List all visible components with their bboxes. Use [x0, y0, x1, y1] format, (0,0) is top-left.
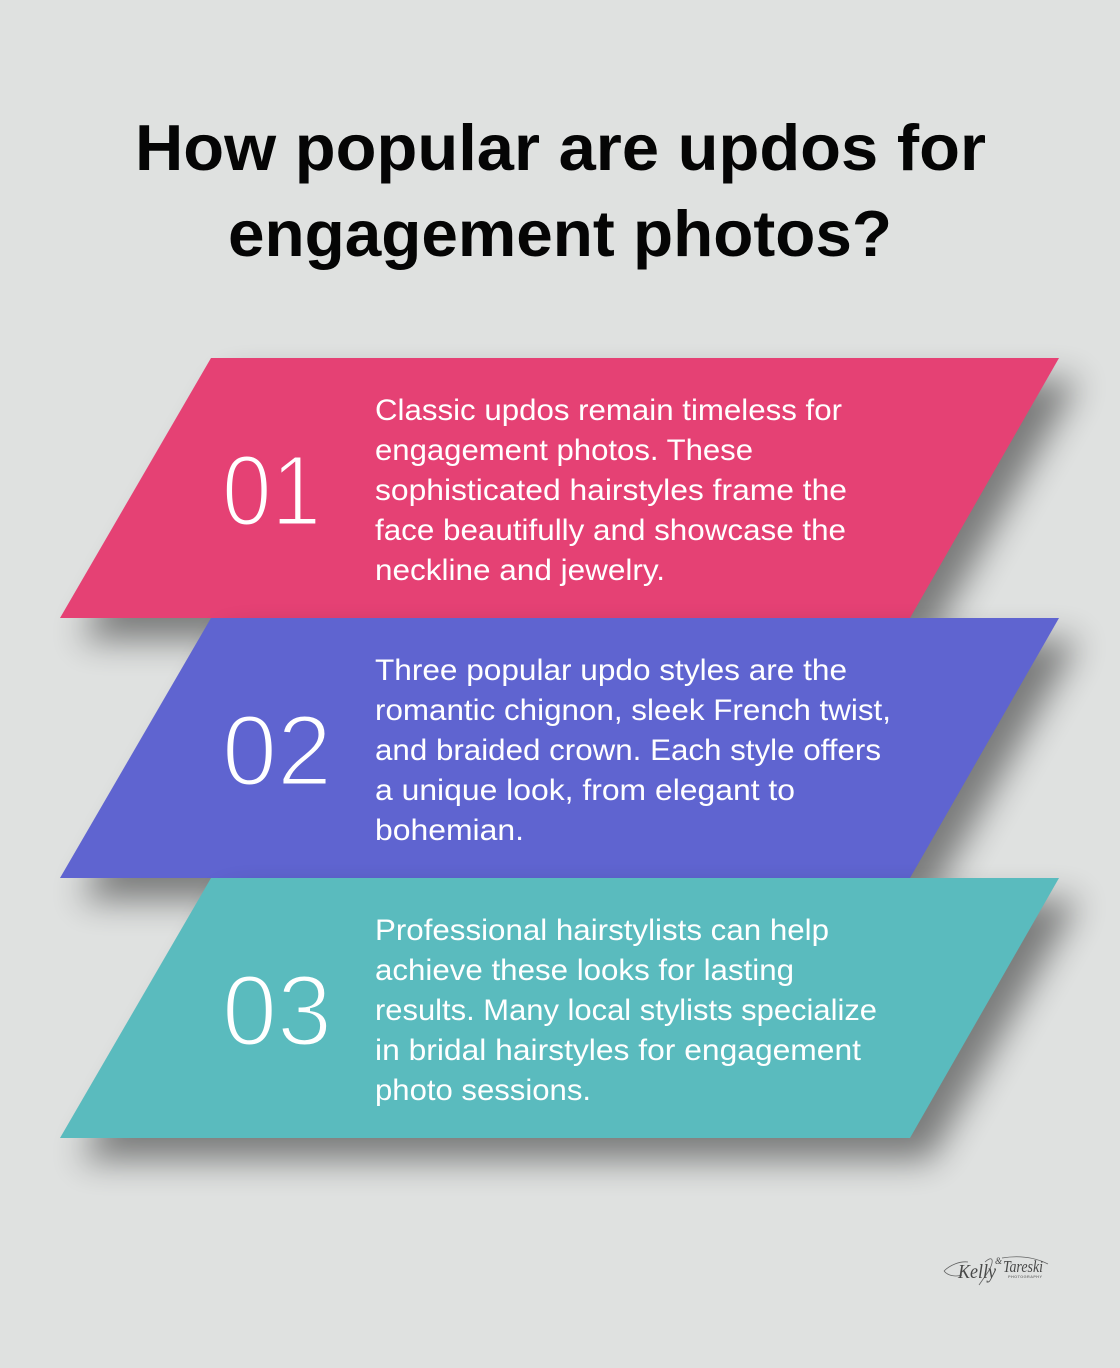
text: step 03 description: Professional hairstylists can help — [375, 914, 829, 947]
text: step 02 description — [375, 654, 891, 847]
panel: step 01 — [60, 358, 1079, 640]
text: step 02 description: a unique look, from elegant to — [375, 774, 795, 807]
text: step 03 description: photo sessions. — [375, 1074, 591, 1107]
text: step 02 description: Three popular updo styles are the — [375, 654, 847, 687]
logo: photographer signature: & — [995, 1256, 1002, 1266]
text: step 02 description: and braided crown. Each style offers — [375, 734, 881, 767]
number 03: 03 — [222, 955, 332, 1067]
text: step 01 description: Classic updos remain timeless for — [375, 394, 842, 427]
logo: photographer signature: Kelly — [957, 1261, 996, 1283]
logo: photographer signature: PHOTOGRAPHY — [1008, 1274, 1042, 1279]
band: blue parallelogram — [60, 618, 1059, 878]
number 02: 02 — [222, 695, 332, 807]
text: step 01 description: face beautifully and showcase the — [375, 514, 846, 547]
text: step 01 description: neckline and jewelry. — [375, 554, 665, 587]
text: step 01 description: sophisticated hairstyles frame the — [375, 474, 847, 507]
band: teal parallelogram — [60, 878, 1059, 1138]
logo: photographer signature — [944, 1256, 1048, 1285]
text: step 02 description: bohemian. — [375, 814, 524, 847]
text: step 03 description: in bridal hairstyles for engagement — [375, 1034, 862, 1067]
text: step 03 description: achieve these looks for lasting — [375, 954, 794, 987]
text: step 03 description: results. Many local stylists specialize — [375, 994, 877, 1027]
text: step 02 description: romantic chignon, sleek French twist, — [375, 694, 891, 727]
panel: step 02 — [60, 618, 1079, 900]
panel: step 03 — [60, 878, 1079, 1160]
title: engagement photos? — [228, 197, 892, 270]
title: How popular are updos for — [135, 111, 986, 184]
text: step 01 description — [375, 394, 847, 587]
band: pink parallelogram — [60, 358, 1059, 618]
text: step 01 description: engagement photos. These — [375, 434, 753, 467]
title — [135, 111, 986, 270]
text: step 03 description — [375, 914, 877, 1107]
number 01: 01 — [222, 435, 321, 547]
logo: photographer signature: Tareski — [1003, 1257, 1043, 1276]
